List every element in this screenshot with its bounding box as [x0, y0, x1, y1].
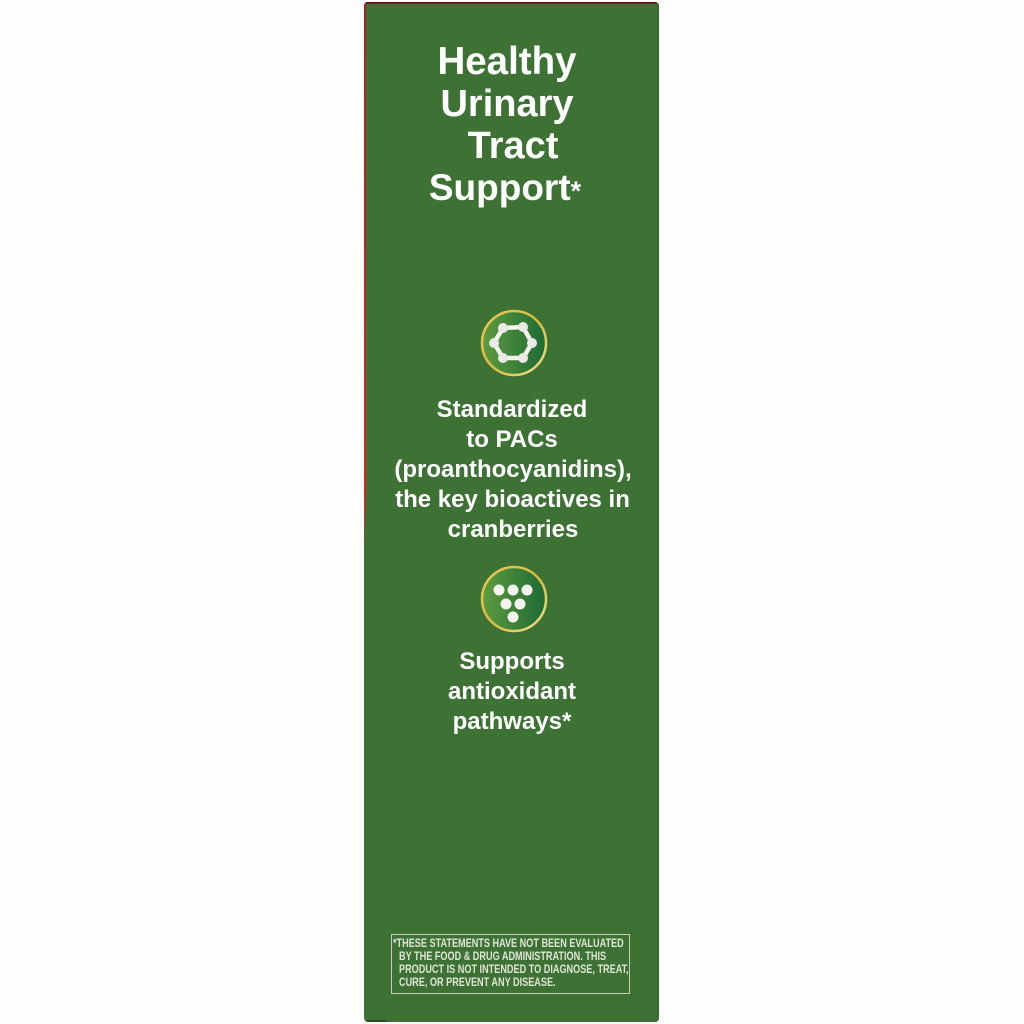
green face: [364, 2, 659, 1022]
icon: molecule ring: [480, 310, 548, 376]
text: standardized to PACs: to PACs: [466, 426, 558, 453]
disclaimer box: PRODUCT IS NOT INTENDED TO DIAGNOSE, TREAT,: [399, 962, 629, 976]
disclaimer box: *THESE STATEMENTS HAVE NOT BEEN EVALUATED: [393, 936, 624, 950]
disclaimer box: [391, 934, 630, 994]
disclaimer box: BY THE FOOD & DRUG ADMINISTRATION. THIS: [399, 949, 606, 963]
text: supports antioxidant pathways: antioxidant: [448, 678, 576, 705]
heading: Urinary: [440, 83, 574, 125]
text: supports antioxidant pathways: [448, 648, 576, 735]
text: standardized to PACs: the key bioactives in: [395, 486, 630, 513]
heading: Healthy: [437, 40, 577, 83]
red left edge strip: [364, 4, 366, 544]
icon: cranberry cluster: [480, 566, 548, 632]
heading: Support*: [429, 167, 581, 208]
panel: green box side: [364, 2, 659, 1022]
text: standardized to PACs: Standardized: [437, 396, 587, 423]
heading: Tract: [468, 125, 558, 167]
text: standardized to PACs: (proanthocyanidins),: [394, 456, 632, 483]
disclaimer box: CURE, OR PREVENT ANY DISEASE.: [399, 975, 556, 989]
text: standardized to PACs: [394, 396, 632, 543]
text: supports antioxidant pathways: pathways*: [453, 708, 571, 735]
dark top edge: [365, 2, 657, 4]
dark bottom edge: [367, 1020, 387, 1022]
text: supports antioxidant pathways: Supports: [459, 648, 565, 675]
heading: [429, 40, 582, 208]
text: standardized to PACs: cranberries: [448, 516, 578, 543]
